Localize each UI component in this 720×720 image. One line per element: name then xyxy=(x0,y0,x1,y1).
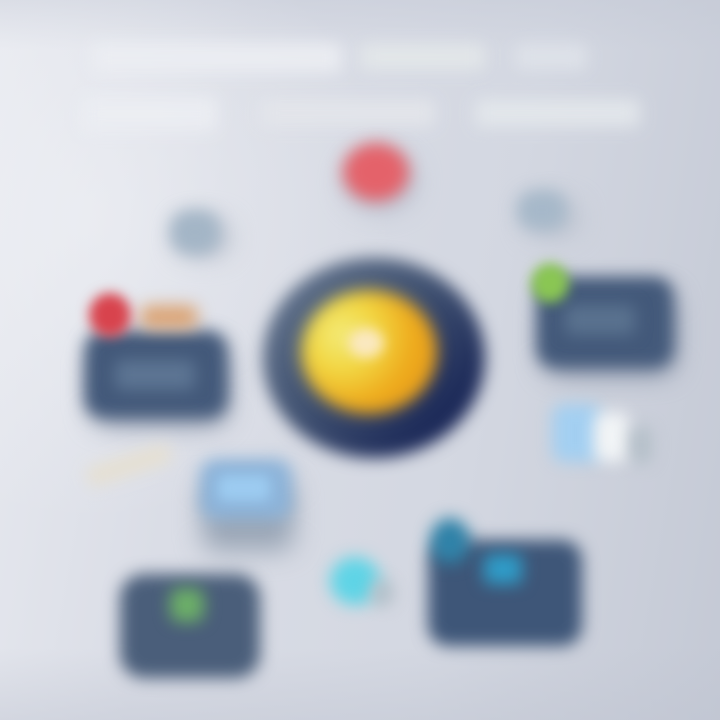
outer ring xyxy=(263,258,485,458)
panel: right card xyxy=(522,254,691,390)
panel: bottom right card xyxy=(416,506,594,658)
icon: grey-blue small shape upper left xyxy=(160,200,237,268)
title line 1 xyxy=(156,41,583,74)
red badge xyxy=(89,293,131,337)
card body xyxy=(428,540,582,646)
central dial xyxy=(251,246,498,471)
card inner lines xyxy=(565,305,635,335)
green badge xyxy=(531,263,569,303)
card shadow xyxy=(543,291,675,375)
title line 2 xyxy=(175,98,642,128)
tile shadow xyxy=(202,481,294,551)
icon: red circle top xyxy=(330,131,424,218)
panel: left card xyxy=(70,284,245,442)
card inner lines xyxy=(115,360,195,390)
panel: bottom left card xyxy=(108,562,272,690)
card body xyxy=(120,574,260,678)
panel: blue tile xyxy=(186,449,310,566)
teal badge xyxy=(430,518,470,564)
icon: cyan circle xyxy=(320,546,398,616)
title xyxy=(156,41,642,128)
card body xyxy=(537,277,673,367)
teal block xyxy=(484,554,522,584)
card body xyxy=(85,331,227,417)
green badge xyxy=(170,588,204,622)
tile highlight xyxy=(218,475,270,501)
card shadow xyxy=(91,345,227,425)
icon: grey-blue small shape upper right xyxy=(510,182,582,242)
yellow disc xyxy=(301,290,437,414)
orange tab xyxy=(140,305,198,329)
tile face xyxy=(200,459,292,519)
faint beige label xyxy=(86,444,172,487)
centre highlight xyxy=(348,328,384,358)
icon: light blue and white tile xyxy=(545,397,654,470)
